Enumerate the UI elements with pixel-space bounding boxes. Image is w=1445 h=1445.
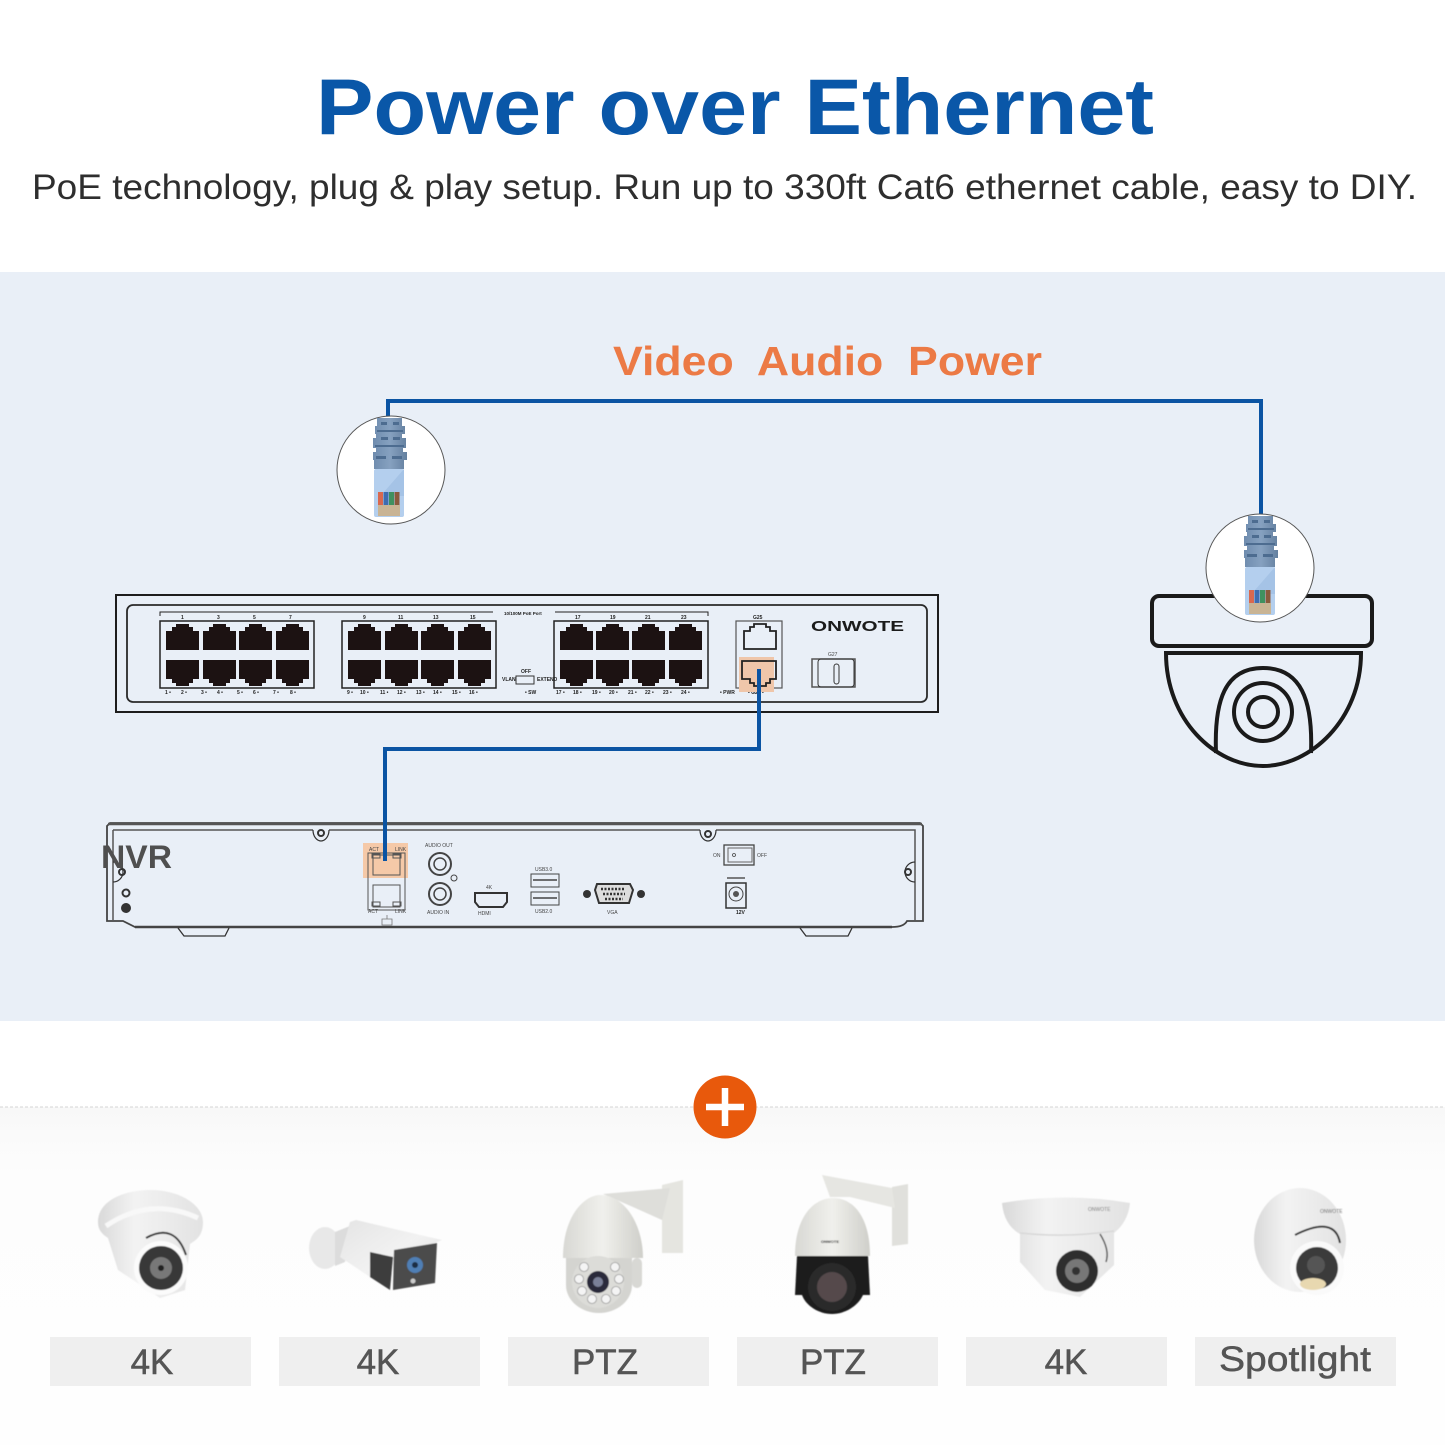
port group 1-8 bbox=[160, 621, 314, 688]
port numbers: 2 • bbox=[181, 690, 187, 696]
DC power jack: 12V bbox=[736, 910, 746, 916]
label: PTZ: PTZ bbox=[800, 1343, 866, 1382]
port numbers: 13 bbox=[433, 615, 439, 621]
label: 4K: 4K bbox=[131, 1343, 173, 1382]
port numbers: 24 • bbox=[681, 690, 690, 696]
label: PTZ bbox=[508, 1337, 709, 1386]
LAN ports: LINK bbox=[395, 909, 407, 915]
subtitle: PoE technology, plug & play setup. Run up to 330ft Cat6 ethernet cable, easy to DIY. bbox=[32, 168, 1417, 207]
camera: spotlight turret: ONWOTE bbox=[1320, 1209, 1343, 1215]
power switch bbox=[713, 845, 767, 865]
port numbers: 11 bbox=[398, 615, 404, 621]
port numbers: 9 • bbox=[347, 690, 353, 696]
port numbers: 5 bbox=[253, 615, 256, 621]
connector: RJ45 plug at switch bbox=[337, 416, 445, 524]
cable: switch to camera bbox=[388, 401, 1261, 516]
port numbers: 3 • bbox=[201, 690, 207, 696]
mounting screws bbox=[113, 830, 915, 896]
port numbers: 15 • bbox=[452, 690, 461, 696]
label: PTZ: PTZ bbox=[572, 1343, 638, 1382]
port numbers: 17 bbox=[575, 615, 581, 621]
camera: 4K turret bbox=[98, 1190, 203, 1298]
camera: 4K bullet bbox=[309, 1220, 442, 1290]
camera: PTZ black: ONWOTE bbox=[821, 1239, 839, 1244]
HDMI port bbox=[475, 885, 507, 917]
port numbers bbox=[165, 611, 764, 696]
DIP switch bbox=[516, 676, 534, 684]
port numbers: 11 • bbox=[380, 690, 389, 696]
divider bbox=[0, 1106, 1445, 1108]
uplink ports G25: G25 bbox=[753, 615, 763, 621]
cable: switch to NVR bbox=[385, 669, 759, 861]
power switch: OFF bbox=[757, 853, 767, 859]
icon: plus badge bbox=[694, 1076, 756, 1138]
port numbers: 10/100M PoE Port bbox=[504, 611, 542, 616]
port numbers: 20 • bbox=[609, 690, 618, 696]
port numbers: 1 • bbox=[165, 690, 171, 696]
USB ports bbox=[531, 867, 559, 915]
port numbers: 10 • bbox=[360, 690, 369, 696]
camera: PTZ light bbox=[563, 1180, 683, 1313]
port numbers: 16 • bbox=[469, 690, 478, 696]
port numbers: 8 • bbox=[290, 690, 296, 696]
label: 4K bbox=[279, 1337, 480, 1386]
HDMI port: HDMI bbox=[478, 911, 491, 917]
port numbers: 6 • bbox=[253, 690, 259, 696]
port group 9-16 bbox=[342, 621, 496, 688]
port numbers: 17 • bbox=[556, 690, 565, 696]
camera: spotlight turret bbox=[1254, 1188, 1346, 1295]
port numbers: 7 • bbox=[273, 690, 279, 696]
port G27: G27 bbox=[828, 652, 838, 658]
audio ports: AUDIO IN bbox=[427, 910, 450, 916]
port numbers: 3 bbox=[217, 615, 220, 621]
port numbers: 22 • bbox=[645, 690, 654, 696]
label: 4K: 4K bbox=[1045, 1343, 1087, 1382]
heading: video audio power: Video Audio Power bbox=[613, 338, 1042, 384]
NVR recorder bbox=[107, 823, 923, 936]
port numbers: 21 • bbox=[628, 690, 637, 696]
label: 4K bbox=[50, 1337, 251, 1386]
port numbers: 23 • bbox=[663, 690, 672, 696]
label: PTZ bbox=[737, 1337, 938, 1386]
port numbers: 1 bbox=[181, 615, 184, 621]
port numbers: 5 • bbox=[237, 690, 243, 696]
port G27 bbox=[812, 652, 855, 687]
uplink ports G25 bbox=[736, 615, 782, 692]
VGA port bbox=[583, 884, 645, 916]
panel: connection diagram background bbox=[0, 272, 1445, 1021]
camera: PTZ black bbox=[795, 1175, 908, 1314]
port numbers: 13 • bbox=[416, 690, 425, 696]
label: Spotlight bbox=[1195, 1337, 1396, 1386]
port numbers: 19 • bbox=[592, 690, 601, 696]
port numbers: 21 bbox=[645, 615, 651, 621]
port group 17-24 bbox=[554, 621, 708, 688]
port numbers: 19 bbox=[610, 615, 616, 621]
label: NVR: NVR bbox=[101, 839, 172, 875]
audio ports: AUDIO OUT bbox=[425, 843, 453, 849]
label: Spotlight: Spotlight bbox=[1219, 1340, 1371, 1379]
port numbers: 14 • bbox=[433, 690, 442, 696]
port numbers: 15 bbox=[470, 615, 476, 621]
audio ports bbox=[425, 843, 457, 916]
LAN ports: ACT bbox=[368, 909, 378, 915]
power switch: ON bbox=[713, 853, 721, 859]
port numbers: 18 • bbox=[573, 690, 582, 696]
port numbers: • G25 • bbox=[748, 690, 764, 696]
port numbers: 23 bbox=[681, 615, 687, 621]
feet bbox=[178, 928, 852, 936]
port numbers: EXTEND bbox=[537, 677, 558, 683]
port numbers: • SW bbox=[525, 690, 536, 696]
connector: RJ45 plug at camera bbox=[1206, 514, 1314, 622]
LAN ports: LINK bbox=[395, 847, 407, 853]
port numbers: VLAN bbox=[502, 677, 516, 683]
USB ports: USB2.0 bbox=[535, 909, 552, 915]
PoE switch bbox=[116, 595, 938, 712]
port numbers: 9 bbox=[363, 615, 366, 621]
label: 4K bbox=[966, 1337, 1167, 1386]
USB ports: USB3.0 bbox=[535, 867, 552, 873]
port numbers: 4 • bbox=[217, 690, 223, 696]
label: 4K: 4K bbox=[357, 1343, 399, 1382]
dome camera outline bbox=[1152, 596, 1372, 766]
brand: ONWOTE: ONWOTE bbox=[811, 618, 904, 635]
LAN ports: ACT bbox=[369, 847, 379, 853]
port numbers: 7 bbox=[289, 615, 292, 621]
VGA port: VGA bbox=[607, 910, 618, 916]
title: Power over Ethernet bbox=[316, 62, 1154, 151]
camera: 4K turret with LEDs: ONWOTE bbox=[1088, 1207, 1111, 1213]
port numbers: 12 • bbox=[397, 690, 406, 696]
DC power jack bbox=[726, 878, 746, 916]
LAN ports bbox=[363, 843, 408, 925]
camera: 4K turret with LEDs bbox=[1002, 1198, 1130, 1297]
HDMI port: 4K bbox=[486, 885, 493, 891]
port numbers: OFF bbox=[521, 669, 531, 675]
port numbers: • PWR bbox=[720, 690, 735, 696]
